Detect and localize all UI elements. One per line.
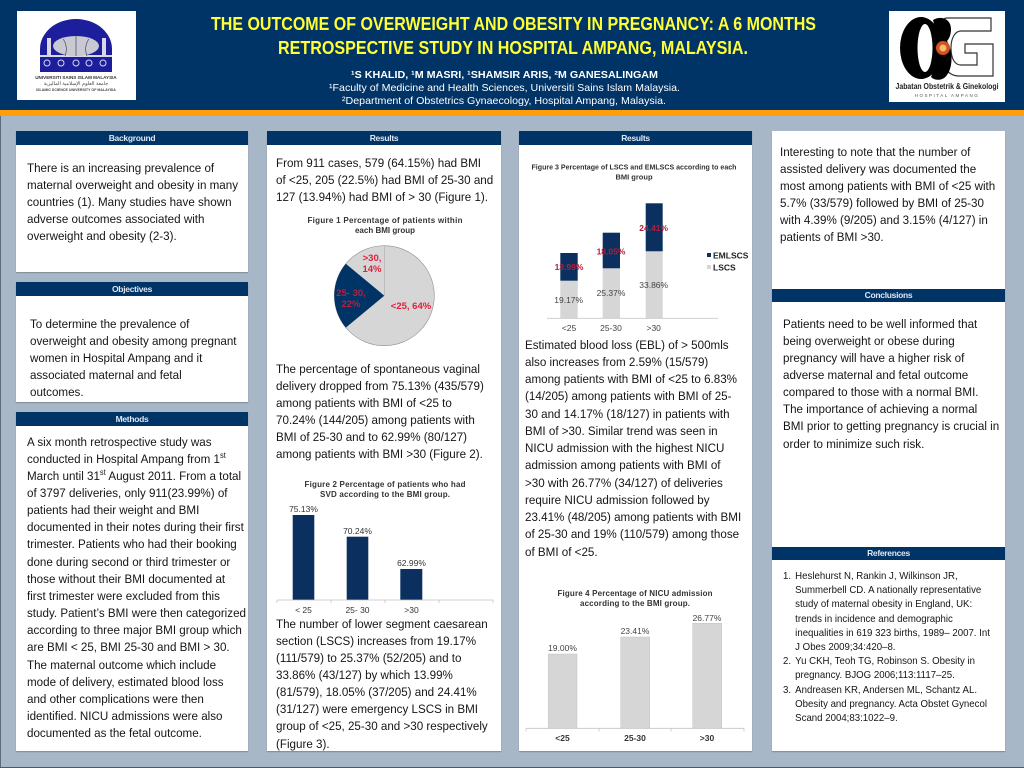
panel: background (16, 131, 248, 272)
text: methods: those without their BMI documented at (27, 572, 225, 586)
figure 1 title: each BMI group (355, 226, 415, 235)
heading: methods (16, 412, 248, 426)
text: methods: The maternal outcome which include (27, 658, 216, 672)
panel: results continued (772, 131, 1005, 289)
figure 4 title: Figure 4 Percentage of NICU admission (558, 589, 713, 598)
text: caesarean section: section (LSCS) increases from 19.17% (276, 634, 476, 648)
text: vaginal delivery: BMI of 25-30 and to 62.99% (80/127) (276, 430, 467, 444)
text: objectives: outcomes. (30, 385, 84, 399)
text: references: Summerbell CD. A nationally representative (795, 585, 981, 596)
panel: methods (16, 412, 248, 751)
text: conclusions: The importance of achieving a normal (783, 402, 977, 416)
text: results intro: From 911 cases, 579 (64.15%) had BMI (276, 156, 481, 170)
heading: objectives: Objectives (112, 284, 152, 294)
text: background (27, 160, 238, 243)
text: caesarean section: (81/579), 18.05% (37/205) and 24.41% (276, 685, 477, 699)
text: conclusions: Patients need to be well informed that (783, 316, 977, 330)
text: results intro: of <25, 205 (22.5%) had BMI of 25-30 and (276, 173, 493, 187)
text: vaginal delivery: 70.24% (144/205) among patients with (276, 413, 475, 427)
header banner (0, 0, 1024, 116)
text: caesarean section: 33.86% (43/127) by which 13.99% (276, 668, 453, 682)
logo: university: ISLAMIC SCIENCE UNIVERSITY OF MALAYSIA (36, 88, 116, 92)
text: blood loss and NICU: admission among patients with BMI of (525, 458, 721, 472)
authors and affiliations: ¹S KHALID, ¹M MASRI, ¹SHAMSIR ARIS, ²M GANESALINGAM (351, 69, 658, 81)
text: methods: of 3797 deliveries, only 911(23.99%) of (27, 486, 228, 500)
text: blood loss and NICU: (14/205) among patients with BMI of 25- (525, 389, 732, 403)
text: background: adverse outcomes associated with (27, 212, 204, 226)
text: vaginal delivery: among patients with BMI of <25 to (276, 396, 452, 410)
text: methods: are BMI < 25, BMI 25-30 and BMI > 30. (27, 640, 230, 654)
text: blood loss and NICU: Estimated blood loss (EBL) of > 500mls (525, 338, 729, 352)
logo: university (17, 11, 136, 100)
text: methods: trimester. Patients who had their booking (27, 537, 237, 551)
chart: figure 3 stacked bars: 18.05% (597, 246, 626, 256)
heading: objectives (16, 282, 248, 296)
chart: figure 4 bars: <25 (555, 733, 570, 743)
chart: figure 3 stacked bars: 33.86% (639, 280, 669, 290)
text: references: study of maternal obesity in England, UK: (795, 599, 972, 610)
chart: figure 3 stacked bars: 25.37% (597, 288, 626, 298)
legend: LSCS (713, 262, 736, 272)
text: vaginal delivery: among patients with BMI >30 (Figure 2). (276, 447, 483, 461)
text: blood loss and NICU: >30 with 26.77% (34/127) of deliveries (525, 476, 723, 490)
text: methods: study. Patient’s BMI were then categorized (27, 606, 246, 620)
text: references: 1. (783, 571, 791, 582)
chart: figure 4 bars: >30 (700, 733, 714, 743)
figure 2 title: SVD according to the BMI group. (320, 490, 450, 499)
text: blood loss and NICU: of BMI of <25. (525, 544, 598, 558)
chart: figure 3 stacked bars (532, 162, 749, 333)
figure 3 title (532, 162, 737, 182)
text: references: Andreasen KR, Andersen ML, Schantz AL. (795, 685, 977, 696)
text: caesarean section: group of <25, 25-30 and >30 respectively (276, 719, 488, 733)
figure 2 title: Figure 2 Percentage of patients who had (304, 480, 466, 489)
text: background: countries (1). Many studies have shown (27, 195, 232, 209)
text: references (783, 571, 990, 724)
text: methods (27, 434, 246, 740)
heading: results (519, 131, 752, 145)
text: objectives: overweight and obesity among pregnant (30, 334, 237, 348)
text: assisted delivery: 5.7% (33/579) followed by BMI of 25-30 (780, 196, 984, 210)
text: conclusions: BMI prior to getting pregnancy is crucial in (783, 419, 999, 433)
text: blood loss and NICU: 23.41% (48/205) among patients with BMI (525, 510, 741, 524)
text: methods: A six month retrospective study was (27, 434, 212, 448)
heading: methods: Methods (116, 414, 148, 424)
heading: results: Results (621, 133, 650, 143)
text: references: 2. (783, 656, 791, 667)
text: caesarean section: (Figure 3). (276, 737, 330, 751)
text: caesarean section: (31/127) were emergency LSCS in BMI (276, 702, 478, 716)
heading: background: Background (109, 133, 155, 143)
text: blood loss and NICU (525, 338, 741, 558)
text: methods: documented as the fetal outcome. (27, 726, 202, 740)
chart: figure 2 bars: < 25 (295, 605, 312, 615)
logo: university: جامعة العلوم الإسلامية الماليزية (44, 81, 108, 87)
authors and affiliations (329, 69, 680, 107)
text: methods: done during second or third trimester or (27, 555, 230, 569)
heading: background (16, 131, 248, 145)
text: caesarean section: (111/579) to 25.37% (52/205) and to (276, 651, 461, 665)
text: vaginal delivery: The percentage of spontaneous vaginal (276, 362, 480, 376)
text: conclusions: adverse maternal and fetal outcome (783, 368, 968, 382)
text: methods: identified. NICU admissions were also (27, 709, 223, 723)
logo: university: UNIVERSITI SAINS ISLAM MALAYSIA (35, 75, 117, 80)
text: assisted delivery: patients of BMI >30. (780, 230, 884, 244)
text: conclusions: order to minimize such risk. (783, 437, 924, 451)
text: assisted delivery (780, 144, 995, 244)
orange rule (0, 110, 1024, 116)
title: RETROSPECTIVE STUDY IN HOSPITAL AMPANG, MALAYSIA. (278, 38, 748, 58)
chart: figure 1 pie: >30, (363, 253, 381, 264)
text: references: 3. (783, 685, 791, 696)
chart: figure 4 bars: 19.00% (548, 643, 577, 653)
logo: obstetrics department (889, 11, 1005, 102)
figure 4 title: according to the BMI group. (580, 599, 690, 608)
heading: references (772, 547, 1005, 560)
text: methods: conducted in Hospital Ampang from 1st (27, 451, 226, 466)
text: background: maternal overweight and obesity in many (27, 178, 238, 192)
figure 3 title: Figure 3 Percentage of LSCS and EMLSCS according to each (532, 162, 737, 172)
text: assisted delivery: Interesting to note that the number of (780, 144, 970, 158)
text: vaginal delivery: delivery dropped from 75.13% (435/579) (276, 379, 484, 393)
figure 1 title: Figure 1 Percentage of patients within (308, 216, 463, 225)
figure 1 title (308, 216, 463, 235)
text: blood loss and NICU: require NICU admission followed by (525, 493, 710, 507)
authors and affiliations: ²Department of Obstetrics Gynaecology, Hospital Ampang, Malaysia. (342, 95, 666, 107)
text: methods: and other complications were then (27, 692, 204, 706)
chart: figure 1 pie: 14% (362, 264, 382, 275)
chart: figure 3 stacked bars: 13.99% (555, 262, 584, 272)
text: methods: mode of delivery, estimated blood loss (27, 675, 224, 689)
text: methods: according to three major BMI group which (27, 623, 242, 637)
text: references: trends in incidence and demographic (795, 614, 953, 625)
authors and affiliations: ¹Faculty of Medicine and Health Sciences, Universiti Sains Islam Malaysia. (329, 82, 680, 94)
text: objectives (30, 316, 237, 399)
chart: figure 1 pie (308, 216, 463, 346)
figure 2 title (304, 480, 466, 499)
text: objectives: women in Hospital Ampang and it (30, 351, 202, 365)
title (211, 14, 816, 58)
text: objectives: To determine the prevalence of (30, 316, 189, 330)
legend (707, 250, 749, 272)
text: vaginal delivery (276, 362, 484, 461)
text: methods: March until 31st August 2011. From a total (27, 468, 241, 483)
panel: objectives (16, 282, 248, 402)
text: blood loss and NICU: NICU admission with the highest NICU (525, 441, 724, 455)
chart: figure 2 bars: 25- 30 (345, 605, 370, 615)
text: references: Scand 2004;83:1022–9. (795, 713, 898, 724)
chart: figure 4 bars (526, 589, 744, 743)
text: references: Heslehurst N, Rankin J, Wilkinson JR, (795, 571, 958, 582)
text: conclusions: compared to those with a normal BMI. (783, 385, 979, 399)
text: objectives: associated maternal and fetal (30, 368, 182, 382)
chart: figure 2 bars (276, 480, 494, 615)
chart: figure 1 pie: 25- 30, (336, 288, 366, 299)
logo: obstetrics department: HOSPITAL AMPANG (915, 93, 979, 98)
heading: results: Results (370, 133, 398, 143)
text: references: J Obes 2009;34:420–8. (795, 642, 895, 653)
panel: conclusions (772, 289, 1005, 547)
text: references: inequalities in 619 323 births, 1989– 2007. Int (795, 628, 990, 639)
chart: figure 2 bars: 70.24% (343, 526, 372, 536)
text: conclusions (783, 316, 999, 451)
chart: figure 1 pie: 22% (341, 299, 361, 310)
text: blood loss and NICU: of 25-30 and 19% (110/579) among those (525, 527, 739, 541)
chart: figure 3 stacked bars: 24.41% (639, 223, 669, 233)
text: assisted delivery: with 4.39% (9/205) and 3.15% (4/127) in (780, 213, 988, 227)
text: methods: patients had their weight and BMI (27, 503, 199, 517)
chart: figure 4 bars: 25-30 (624, 733, 646, 743)
legend: EMLSCS (713, 250, 749, 260)
chart: figure 2 bars: 62.99% (397, 558, 426, 568)
text: background: overweight and obesity (2-3). (27, 229, 177, 243)
heading: references: References (867, 548, 910, 558)
text: references: pregnancy. BJOG 2006;113:1117–25. (795, 670, 955, 681)
text: references: Yu CKH, Teoh TG, Robinson S. Obesity in (795, 656, 975, 667)
text: conclusions: being overweight or obese during (783, 334, 955, 348)
chart: figure 4 bars: 23.41% (621, 626, 650, 636)
text: assisted delivery: assisted delivery was documented the (780, 162, 976, 176)
text: conclusions: pregnancy will have a higher risk of (783, 351, 964, 365)
chart: figure 3 stacked bars: 25-30 (600, 323, 622, 333)
text: methods: first trimester were excluded from this (27, 589, 220, 603)
heading: results (267, 131, 501, 145)
text: blood loss and NICU: also increases from 2.59% (15/579) (525, 355, 708, 369)
text: blood loss and NICU: 30 and 14.17% (18/127) in patients with (525, 406, 730, 420)
figure 3 title: BMI group (615, 172, 653, 182)
chart: figure 2 bars: >30 (404, 605, 419, 615)
chart: figure 2 bars: 75.13% (289, 504, 318, 514)
chart: figure 3 stacked bars: <25 (562, 323, 576, 333)
text: methods: documented in their notes during their first (27, 520, 244, 534)
chart: figure 1 pie: <25, 64% (391, 301, 432, 312)
chart: figure 3 stacked bars: >30 (646, 323, 661, 333)
panel: results column 1 (267, 131, 501, 751)
text: background: There is an increasing prevalence of (27, 160, 214, 174)
text: blood loss and NICU: BMI of >30. Similar trend was seen in (525, 424, 718, 438)
text: caesarean section (276, 616, 488, 751)
heading: conclusions: Conclusions (865, 290, 912, 300)
text: results intro (276, 156, 493, 204)
text: blood loss and NICU: among patients with BMI of <25 to 6.83% (525, 372, 737, 386)
panel: results column 2 (519, 131, 752, 751)
text: references: Obesity and pregnancy. Acta Obstet Gynecol (795, 699, 987, 710)
text: caesarean section: The number of lower segment caesarean (276, 616, 488, 630)
text: assisted delivery: most among patients with BMI of <25 with (780, 179, 995, 193)
heading: conclusions (772, 289, 1005, 302)
chart: figure 4 bars: 26.77% (693, 613, 722, 623)
text: results intro: 127 (13.94%) had BMI of > 30 (Figure 1). (276, 190, 488, 204)
chart: figure 3 stacked bars: 19.17% (554, 295, 584, 305)
panel: references (772, 547, 1005, 751)
figure 4 title (558, 589, 713, 608)
